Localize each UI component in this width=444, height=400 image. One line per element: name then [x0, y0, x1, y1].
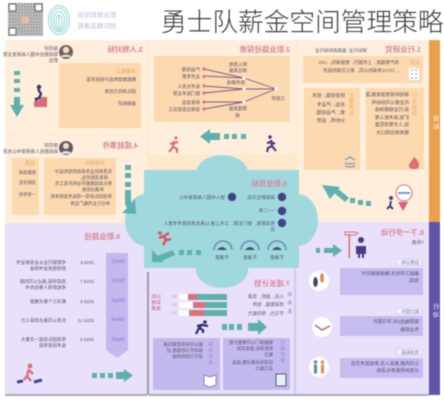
timeline rows: 技术研发项目 — [39, 342, 66, 349]
timeline rows: 考核获得人事任命书 — [25, 284, 66, 291]
right box: 能力 — [264, 351, 273, 358]
icon: building — [409, 68, 419, 80]
heading 1: 1.行业研究 — [385, 45, 421, 54]
step arrow: Step5 — [111, 337, 125, 343]
path diagram: 部门技术主管 — [173, 90, 200, 97]
timeline rows: 2020.3 — [80, 337, 94, 342]
icon: tablet — [276, 374, 286, 386]
arrow: into cloud — [122, 165, 136, 214]
company box: 、CFCG等保险公司、第三方保险经济 — [323, 67, 399, 74]
timeline rows: 获得相关证书等级 — [30, 265, 66, 272]
panel: 2 career path exploration — [148, 40, 296, 155]
path diagram: 岗位发展 — [229, 67, 247, 74]
plan notes — [248, 291, 292, 317]
person note: 张同学 — [44, 45, 58, 52]
gauges — [214, 241, 286, 261]
side bar: goals — [429, 40, 440, 223]
arrow: left — [200, 129, 246, 144]
heading 3: 3.人物对标 — [107, 45, 143, 54]
left box: 构建高效 — [18, 169, 36, 176]
person note: 目前担任人寿研发中心负责 — [2, 148, 58, 155]
QR code — [8, 3, 43, 36]
company box: 资产管理类、上市银行、智能保险、LIIG — [318, 59, 399, 66]
left box — [153, 338, 220, 390]
right box: 根据部门公司季度计划 — [229, 339, 273, 346]
icon: walking figure — [17, 364, 42, 382]
step arrow: Step2 — [111, 278, 125, 284]
goal items: 目标职位方向 — [247, 194, 275, 201]
trend box: 趋 — [412, 104, 417, 111]
panel: goals background — [5, 40, 429, 223]
trend box: 相关岗位缺口大 — [376, 129, 409, 136]
icon: signpost and person — [345, 232, 366, 258]
left box: 一项专利 — [19, 191, 36, 198]
icon: two people — [309, 357, 329, 377]
action 3 — [309, 349, 423, 378]
left box: 习 — [208, 348, 213, 354]
icon: waves — [345, 157, 355, 167]
arrow: down-left — [152, 250, 201, 262]
path diagram: 管理发展 — [229, 105, 247, 112]
panel: 1 industry research — [297, 40, 429, 223]
icon: climbing figure — [34, 85, 47, 107]
step arrow: Step1 — [111, 259, 125, 265]
goal items: 一~二年 — [258, 207, 275, 214]
action 2: 专业技能 — [400, 326, 419, 333]
person note: 职位 — [48, 57, 58, 64]
step arrow: Step3 — [111, 298, 125, 304]
plan notes: 能 — [287, 299, 292, 306]
heading 7: 7.成长计划 — [254, 279, 290, 288]
panel: 5 career goal cloud — [125, 155, 318, 288]
right box: 行 — [280, 339, 285, 346]
icon: pink runner — [169, 136, 178, 153]
right box: 制定目标,提高实际 — [236, 345, 273, 352]
plan notes: 素 — [287, 308, 292, 314]
key skills box: 关键能力 — [116, 68, 136, 75]
stacked bars: 认知 — [151, 293, 161, 300]
logo text — [77, 10, 116, 30]
action 2: 每周抽出2天,学习提升 — [373, 318, 419, 325]
role box: 总监、产品专 — [317, 101, 345, 108]
role box: 研发经理、技术 — [312, 92, 345, 99]
right box: 案 — [280, 357, 285, 364]
plan notes: 项目管理、软件 — [252, 301, 284, 308]
path diagram: 技术负责人 — [177, 83, 200, 90]
left box: 保持学习积极性,记 — [166, 347, 203, 354]
icon: avatar — [59, 141, 73, 155]
person note — [2, 45, 58, 64]
plan notes: 知 — [287, 291, 292, 298]
company box: 企业 — [410, 59, 420, 66]
heading 5: 5.职业目标 — [251, 179, 287, 188]
right box — [44, 158, 116, 215]
timeline rows: 解决三个重点难题 — [30, 298, 66, 305]
side bar: actions: 动 — [433, 312, 439, 319]
person note — [2, 142, 58, 155]
right box: 并在行业内推广应用 — [70, 200, 110, 207]
left box: 结果 — [25, 160, 35, 167]
arrow: right — [222, 319, 267, 335]
role box — [304, 88, 360, 170]
right box: 向领导同事讨教,提高 — [232, 359, 273, 366]
side bar: actions: 行 — [433, 303, 439, 311]
path diagram: 产品经理 — [182, 66, 200, 73]
path diagram: 工程师 — [271, 95, 285, 102]
action 2: 能力提升 — [401, 308, 419, 315]
path diagram: 转入其他 — [229, 61, 247, 68]
step arrow — [106, 253, 128, 358]
panel: 4 achievements — [2, 135, 147, 223]
timeline rows: 2019.12 — [77, 318, 94, 323]
path diagram: 业务专家 — [182, 73, 200, 80]
icon: person with target — [387, 185, 412, 211]
heading 4: 4.成就事件 — [102, 141, 138, 150]
panel: actions background — [5, 222, 429, 395]
left box: 流程优化 — [18, 179, 36, 186]
path diagram: 线 — [235, 112, 240, 118]
right box: 负责寿险业务系统的架构设计 — [54, 168, 112, 175]
stacked bars: 10 — [171, 310, 177, 315]
icon: sprinter — [196, 320, 208, 334]
action 2 — [312, 308, 423, 337]
right box: 带领团队获得一项技术发明专利 — [51, 193, 112, 200]
goal items: 进入中国人寿研发中心 — [179, 194, 225, 201]
trend box: 内主要公司纷纷布 — [371, 99, 409, 106]
person note: 目前担任中国人寿研发主管 — [2, 51, 58, 58]
stacked bars: 实践 — [151, 299, 161, 306]
panel: 8 next step — [296, 222, 429, 396]
trend box: 势 — [412, 110, 417, 117]
timeline rows: 2019.7 — [80, 279, 94, 284]
arrow: right — [92, 369, 133, 382]
left box: 方 — [208, 353, 213, 360]
role box: 分析师、运营 — [317, 117, 345, 124]
title: 勇士队薪金空间管理策略 — [161, 2, 444, 39]
stacked bars: 20 — [171, 302, 177, 307]
role box: 主 — [349, 92, 354, 99]
plan notes: 学习力、领导能力 — [248, 310, 284, 317]
trend box: 保险科技快速发展,国 — [365, 91, 409, 98]
person note: 李同学 — [44, 142, 58, 149]
logo text: 职业规划培训 — [78, 10, 116, 19]
timeline rows: 带领团队完成一次重大 — [21, 336, 66, 343]
action 3: 计划并积极参与活动 — [376, 367, 419, 374]
left box — [12, 158, 39, 215]
gauges: 不满意 — [270, 254, 284, 261]
stacked bars — [151, 293, 227, 316]
action 1: 自我认知 — [401, 259, 419, 266]
action 3: 资源拓展 — [401, 349, 419, 356]
stacked bars: 资源 — [151, 305, 161, 312]
side bar: goals: 目 — [433, 116, 439, 123]
deadline: 7月底 — [412, 239, 424, 246]
company box — [303, 56, 423, 83]
trend box: 加,人才需求旺盛 — [375, 121, 409, 128]
left box: 录学习到的内容 — [172, 353, 203, 360]
right box: 关键事件 — [85, 160, 105, 167]
step arrow: Step4 — [111, 317, 125, 323]
key skills box: 数据库架构设计经验丰富 — [86, 76, 136, 83]
path diagram: 首席信息官员工 — [168, 106, 200, 113]
target industry: 目标行业: 金融高科技行业 — [315, 47, 367, 54]
heading 2: 2.职业路径探索 — [239, 45, 290, 54]
icon: book — [204, 375, 216, 387]
cloud shape — [125, 155, 318, 288]
action 1 — [309, 259, 423, 295]
gauges: 不满意 — [243, 254, 257, 261]
arrow: up-left — [322, 185, 371, 206]
timeline rows — [16, 259, 94, 349]
panel: 3 person benchmark — [2, 40, 147, 134]
action 3: 公司内部,联系人员,参加技术交流 — [350, 360, 419, 367]
trend box: 业 — [412, 98, 417, 105]
right box — [223, 338, 290, 390]
role box: 岗 — [349, 105, 354, 111]
path diagram: 技术路线 — [227, 79, 245, 86]
logo text: 团队精品课程 — [77, 21, 116, 30]
trend box: 局,行业规模持续 — [375, 106, 409, 113]
timeline rows: 2019.9 — [80, 299, 94, 304]
icon: purple runner — [267, 135, 276, 152]
goal items: 资深研发、部门主管、工作上进,认真负责的技术专家人 — [163, 220, 275, 227]
right box: 方 — [280, 351, 285, 358]
arrow: down — [10, 71, 24, 117]
heading 8: 8.下一步行动 — [380, 228, 424, 237]
timeline rows: 考取银行业从业资格证书 — [16, 259, 66, 266]
right box: 动 — [280, 345, 285, 352]
heading 6: 6.职业路径 — [84, 232, 120, 241]
role box: 位 — [349, 110, 354, 117]
timeline rows: 2019.6 — [80, 260, 94, 265]
plan notes: 人员、组织、资源 — [248, 293, 284, 300]
gauges: 不满意 — [215, 254, 229, 261]
path diagram: 研发总监 — [182, 99, 200, 106]
stacked bars: 10 — [171, 294, 177, 299]
icon: footprints — [309, 271, 329, 291]
action 1: 完成。 — [405, 277, 419, 284]
role box: 家、产品经理、 — [312, 109, 345, 116]
icon: check mark — [312, 317, 332, 337]
path diagram — [154, 56, 290, 122]
key skills box: 金融知识 — [118, 100, 136, 107]
right box: 研发流程优化, — [80, 174, 108, 181]
right box: 牵头完成数据平台的开发工作 — [54, 180, 112, 187]
goal items: 员 — [270, 227, 275, 233]
role box: 要 — [349, 99, 354, 105]
goal items — [163, 193, 286, 233]
panel: 6 career path — [5, 232, 147, 396]
left box: 跟公司导师定期沟通 — [163, 341, 203, 348]
left box: 法 — [208, 359, 213, 366]
icon: fire — [409, 157, 419, 169]
side bar: actions — [429, 222, 440, 395]
panel: 7 growth plan — [147, 268, 296, 396]
arrow: right — [316, 244, 342, 257]
trend box — [365, 88, 424, 170]
key skills box — [59, 63, 141, 128]
key skills box: 团队领导力优秀 — [104, 88, 136, 95]
timeline rows: 完成项目,通过公司内部 — [19, 278, 66, 285]
timeline rows: 负责公司重点项目人力 — [21, 317, 66, 324]
icon: fingerprint logo — [48, 6, 70, 34]
left box: 学 — [208, 341, 213, 347]
trend box: 扩张,技术投入增 — [375, 114, 409, 121]
icon: runner — [158, 231, 171, 245]
right box: 并通过验收 — [81, 186, 104, 193]
side bar: goals: 标 — [433, 123, 439, 131]
right box: 员工能力 — [255, 365, 273, 372]
icon: avatar — [59, 45, 73, 59]
action 1: 跟踪工作任务,确保按期交付 — [361, 270, 419, 277]
trend box: 行 — [412, 92, 417, 99]
